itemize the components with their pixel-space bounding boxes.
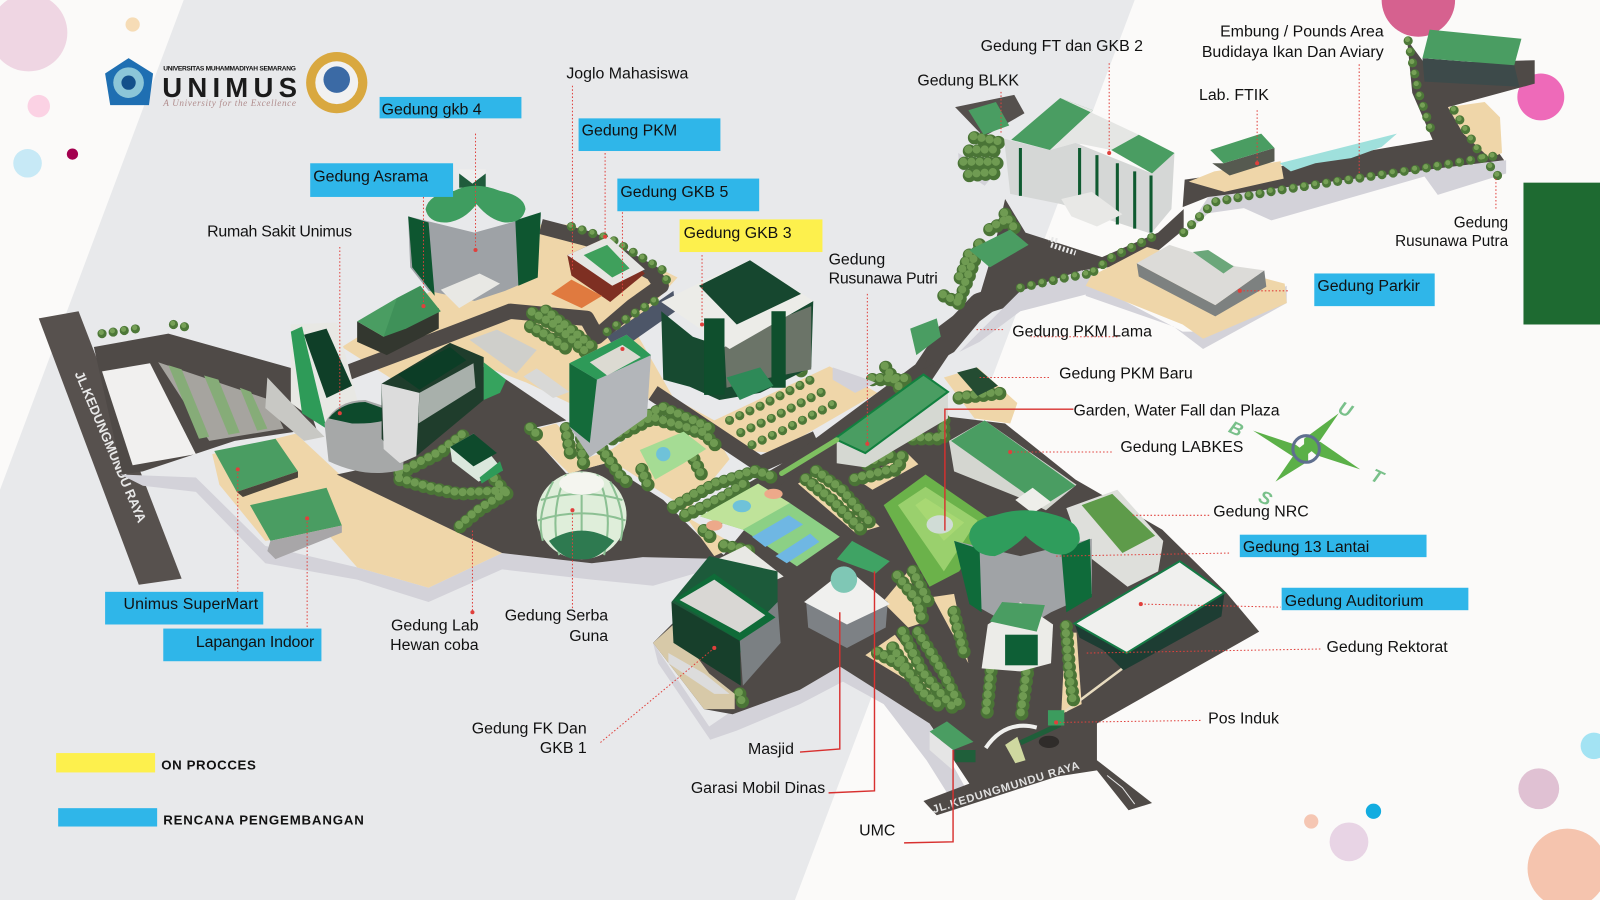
label: Rumah Sakit Unimus: Rumah Sakit Unimus [207, 224, 352, 241]
label: Gedung Rektorat: Gedung Rektorat [1327, 639, 1448, 656]
leader anchor dots [236, 151, 1259, 724]
label: Gedung NRC: Gedung NRC [1213, 503, 1309, 520]
label: Gedung GKB 5 [617, 179, 759, 211]
Lapangan Indoor building [250, 488, 342, 559]
parking plot [1086, 247, 1287, 349]
label: Garasi Mobil Dinas: Garasi Mobil Dinas [691, 780, 825, 797]
sports fields [640, 432, 840, 566]
tree strip sand [527, 418, 737, 556]
Masjid [804, 566, 890, 648]
label: Gedung Parkir: Gedung Parkir [1317, 278, 1421, 295]
west sand plot [212, 434, 502, 588]
upper sand plot [342, 224, 878, 453]
label: Gedung Lab Hewan coba: Hewan coba [390, 637, 479, 654]
label: Gedung Rusunawa Putra [1395, 215, 1509, 250]
Gedung Rusunawa Putra [1422, 30, 1521, 87]
label: Gedung PKM: Gedung PKM [582, 123, 677, 140]
label: Gedung Asrama: Gedung Asrama [313, 169, 428, 186]
legend: development plan [58, 808, 365, 827]
south retaining wall east [653, 643, 964, 796]
compass: S [1255, 486, 1276, 510]
Gedung PKM and Joglo [551, 237, 645, 308]
Gedung Asrama [357, 286, 441, 355]
logo: UNIMUS: UNIMUS [162, 72, 297, 103]
label: Lapangan Indoor [163, 629, 321, 661]
Gedung PKM Lama [910, 318, 941, 355]
Rumah Sakit Unimus [265, 322, 406, 473]
Gedung tower centre [569, 335, 651, 457]
Gedung BLKK plot [955, 95, 1024, 137]
label: Gedung Rusunawa Putra: Gedung [1454, 215, 1508, 232]
Garden, Water Fall and Plaza [884, 474, 992, 587]
label: Garden, Water Fall dan Plaza: Garden, Water Fall dan Plaza [1073, 402, 1280, 419]
north connector road and junction [923, 199, 1184, 369]
Gedung BLKK [968, 102, 1009, 135]
label: Gedung Rusunawa Putri: Rusunawa Putri [829, 271, 938, 288]
label: Gedung LABKES: Gedung LABKES [1120, 439, 1243, 456]
legend: on process: ON PROCCES [161, 757, 256, 772]
label: Gedung Rusunawa Putra: Rusunawa Putra [1395, 233, 1509, 250]
label: Pos Induk: Pos Induk [1208, 710, 1279, 727]
Gedung gkb 4 tower [408, 169, 541, 308]
label: Gedung GKB 5: Gedung GKB 5 [620, 184, 728, 201]
label: Gedung FT dan GKB 2: Gedung FT dan GKB 2 [981, 38, 1143, 55]
Gedung Rektorat [982, 602, 1053, 671]
compass: T [1368, 464, 1388, 489]
Gedung LABKES [949, 420, 1077, 513]
label: Gedung FK Dan GKB 1 [472, 721, 587, 757]
west parking road [94, 334, 316, 474]
west retaining walls [120, 474, 730, 602]
east campus asphalt [653, 408, 1259, 815]
label: Gedung Serba Guna [505, 607, 608, 645]
Lab. FTIK [1210, 134, 1274, 176]
label: Gedung Auditorium [1282, 588, 1468, 610]
label: Lapangan Indoor: Lapangan Indoor [196, 634, 315, 651]
road: Jl. Kedungmundu Raya south: JL.KEDUNGMUNDU RAYA [931, 760, 1081, 816]
label: Gedung GKB 3: Gedung GKB 3 [684, 225, 792, 242]
road: Jl. Kedungmundu Raya west: JL.KEDUNGMUNDU RAYA [72, 369, 149, 525]
upper road [296, 227, 661, 393]
logo: UNIMUS: A University for the Excellence [162, 98, 296, 108]
Rusunawa Putri wall [833, 367, 876, 393]
label: Gedung Parkir [1314, 273, 1435, 306]
Gedung FK dan GKB 1 [653, 546, 784, 709]
south road line [1107, 776, 1135, 804]
label: Gedung BLKK: Gedung BLKK [917, 73, 1019, 90]
label: Gedung Rusunawa Putri [829, 251, 938, 288]
Gedung Auditorium [1074, 561, 1224, 670]
label: UMC: UMC [859, 823, 895, 840]
Gedung green block [782, 374, 948, 473]
label: Gedung PKM [579, 118, 720, 151]
Gedung PKM Baru [957, 367, 998, 396]
Gedung GKB 3 [661, 260, 813, 400]
label: Embung [1202, 24, 1384, 61]
logo: UNIMUS: UNIVERSITAS MUHAMMADIYAH SEMARANG [163, 65, 296, 72]
label: Unimus SuperMart: Unimus SuperMart [123, 596, 259, 613]
grey annex roofs [469, 330, 569, 398]
green side block [1523, 183, 1600, 324]
compass [1226, 397, 1388, 510]
connector road [714, 267, 1082, 515]
Gedung Lab Hewan coba [450, 434, 503, 484]
Gedung NRC [1066, 490, 1163, 587]
sand beds [798, 367, 1082, 714]
road: Jl. Kedungmundu Raya west [39, 311, 182, 585]
label: Gedung Rusunawa Putri: Gedung [829, 251, 885, 268]
label: Gedung Serba Guna: Gedung Serba [505, 607, 608, 624]
pond [1280, 134, 1397, 171]
road curb [1065, 593, 1223, 711]
label: Gedung GKB 3 [680, 219, 822, 252]
label: Lab. FTIK: Lab. FTIK [1199, 87, 1269, 104]
north-east road with retaining wall [1183, 40, 1535, 237]
Gedung 13 Lantai [954, 510, 1092, 631]
Gedung Parkir [1137, 245, 1266, 316]
compass: B [1226, 416, 1247, 441]
compass: U [1335, 397, 1357, 422]
legend: development plan: RENCANA PENGEMBANGAN [163, 812, 365, 827]
Unimus SuperMart building [214, 439, 298, 497]
Garasi Mobil Dinas [837, 541, 890, 573]
leader lines [238, 63, 1496, 843]
gate and Pos Induk [930, 710, 1064, 770]
central asphalt [337, 366, 730, 563]
label: Gedung Lab Hewan coba: Gedung Lab [391, 618, 479, 635]
label: Gedung FK Dan GKB 1: GKB 1 [540, 740, 587, 757]
parking lots [102, 362, 284, 465]
label: Gedung 13 Lantai [1240, 535, 1427, 557]
main dark-roof block [382, 343, 506, 463]
label: Gedung Auditorium: Gedung Auditorium [1285, 593, 1423, 610]
label: Unimus SuperMart [105, 592, 263, 624]
label: Embung: Embung / Pounds Area [1220, 24, 1384, 41]
label: Gedung Lab Hewan coba [390, 618, 479, 654]
Gedung Serba Guna dome [537, 471, 627, 559]
blue-grey wall [607, 291, 676, 352]
label: Gedung 13 Lantai: Gedung 13 Lantai [1243, 539, 1369, 556]
label: Joglo Mahasiswa: Joglo Mahasiswa [566, 66, 688, 83]
label: Gedung gkb 4: Gedung gkb 4 [382, 101, 482, 118]
grey diagonal background panel [0, 0, 1135, 900]
Gedung hill side roof [969, 230, 1029, 267]
central roads around GKB 3 [653, 393, 816, 464]
trees [101, 40, 1500, 716]
label: Embung: Budidaya Ikan Dan Aviary [1202, 44, 1384, 61]
logo: UNIMUS [105, 52, 367, 113]
label: Gedung PKM Baru: Gedung PKM Baru [1059, 366, 1193, 383]
label: Gedung Asrama [310, 163, 453, 197]
label: Gedung gkb 4 [380, 97, 521, 118]
legend: on process [56, 753, 256, 772]
label: Gedung PKM Lama: Gedung PKM Lama [1012, 324, 1152, 341]
Gedung FT dan GKB 2 [1004, 98, 1174, 234]
label: Gedung Serba Guna: Guna [569, 628, 608, 645]
label: Masjid: Masjid [748, 741, 794, 758]
label: Gedung FK Dan GKB 1: Gedung FK Dan [472, 721, 587, 738]
